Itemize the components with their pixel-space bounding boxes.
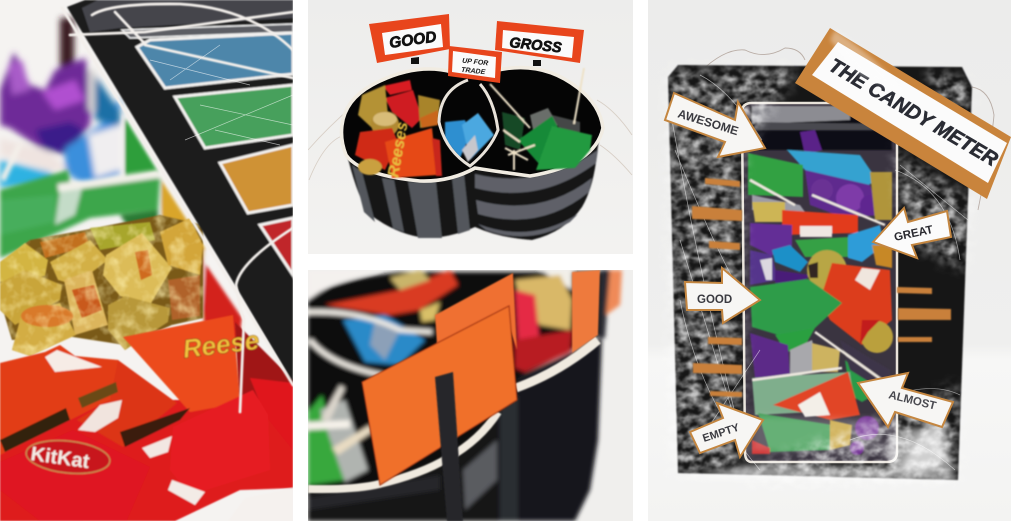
- box body: [668, 65, 972, 480]
- box side stripes: [346, 130, 600, 240]
- box interior dark: [308, 272, 600, 488]
- rope inner divider: [308, 312, 432, 332]
- sign: THE CANDY METER: THE CANDY METER: [825, 55, 1002, 171]
- candy: blue right: [848, 225, 884, 262]
- panel: two-lobed candy sorting box: [308, 0, 633, 254]
- arrow: GOOD: [685, 268, 760, 323]
- candy bar label: Kit Kat: [24, 438, 112, 476]
- arrow: EMPTY: EMPTY: [701, 422, 742, 445]
- front orange flag: [362, 306, 517, 485]
- arrow: EMPTY: [690, 403, 763, 457]
- candy: gross compartment: [490, 68, 592, 170]
- lollipop sticks: [750, 180, 885, 380]
- spider web: [668, 68, 975, 484]
- arrow: GREAT: GREAT: [893, 224, 934, 244]
- arrow: AWESOME: AWESOME: [676, 106, 740, 138]
- rope rim: [308, 412, 498, 489]
- meter box top with candy windows: [67, 0, 293, 383]
- candy: purple kisses: [805, 170, 880, 218]
- candy: blue wrappers top: [787, 150, 877, 190]
- panel: the candy meter box: [648, 0, 1011, 521]
- sign: THE CANDY METER: [795, 28, 1011, 199]
- arrow: ALMOST: ALMOST: [887, 389, 937, 413]
- candy: big green lollipop: [750, 279, 842, 338]
- flag stick: [435, 372, 463, 521]
- window with candy: [742, 103, 897, 462]
- sign: GROSS: GROSS: [509, 35, 563, 56]
- divider rope: [439, 80, 498, 166]
- window: blue: [137, 33, 293, 88]
- candy: purple left: [750, 223, 792, 255]
- candy: gold and red: [752, 202, 785, 222]
- box side panels: [123, 115, 242, 348]
- arrow: ALMOST: [858, 373, 953, 427]
- candy: red with white: [773, 372, 860, 420]
- panel: candy pile and meter close-up: [0, 0, 293, 521]
- red candy bars: [0, 315, 293, 521]
- candy: gold right: [861, 321, 893, 353]
- green lollipops: [0, 142, 160, 258]
- candy: good compartment: [355, 80, 442, 179]
- candy: lower mixed: [750, 333, 790, 378]
- candy: good compartment: Reeses: [385, 120, 412, 179]
- candy: up for trade compartment: [445, 113, 494, 162]
- drum wall left side: [308, 415, 498, 521]
- panel: close-up of orange flag on box: [308, 270, 633, 521]
- back orange flag: [435, 273, 517, 350]
- window: orange: [220, 145, 293, 213]
- peanut butter cups: [0, 215, 203, 356]
- sign: GOOD: GOOD: [388, 29, 437, 52]
- blurred purple and blue candies: [0, 18, 120, 188]
- sign: UP FOR TRADE: [448, 46, 502, 83]
- sign: GROSS: [495, 21, 584, 63]
- candy: green top: [748, 153, 803, 197]
- drum wall right side: [497, 338, 602, 521]
- candy: gold cup: [807, 250, 847, 290]
- box interior: [342, 68, 603, 181]
- candy bar label: Reese's: Reese: [181, 325, 261, 364]
- arrow: GREAT: [873, 208, 951, 258]
- candy: orange bars: [820, 263, 892, 345]
- candy: gold at right: [870, 172, 892, 220]
- arrow: AWESOME: [665, 93, 765, 157]
- candy bar label: Kit Kat: KitKat: [29, 443, 91, 473]
- candy: green mid: [795, 237, 848, 257]
- blurred candy behind flag: [325, 270, 458, 315]
- window: green: [175, 85, 293, 148]
- gauge tick marks: [692, 178, 951, 397]
- sign: UP FOR TRADE: TRADE: [461, 67, 486, 76]
- web lines over windows: [150, 45, 293, 145]
- sign: UP FOR TRADE: UP FOR: [462, 58, 489, 67]
- candy: green bottom: [758, 413, 833, 452]
- arrow: GOOD: GOOD: [697, 294, 732, 306]
- right orange flag: [572, 270, 600, 353]
- sign posts: [411, 57, 541, 66]
- strings: [700, 48, 994, 210]
- strings: [308, 100, 632, 180]
- window: red: [260, 218, 293, 275]
- candy: blue and purple mid: [772, 245, 808, 272]
- white rope trim: [62, 4, 293, 412]
- sign: GOOD: [369, 14, 450, 63]
